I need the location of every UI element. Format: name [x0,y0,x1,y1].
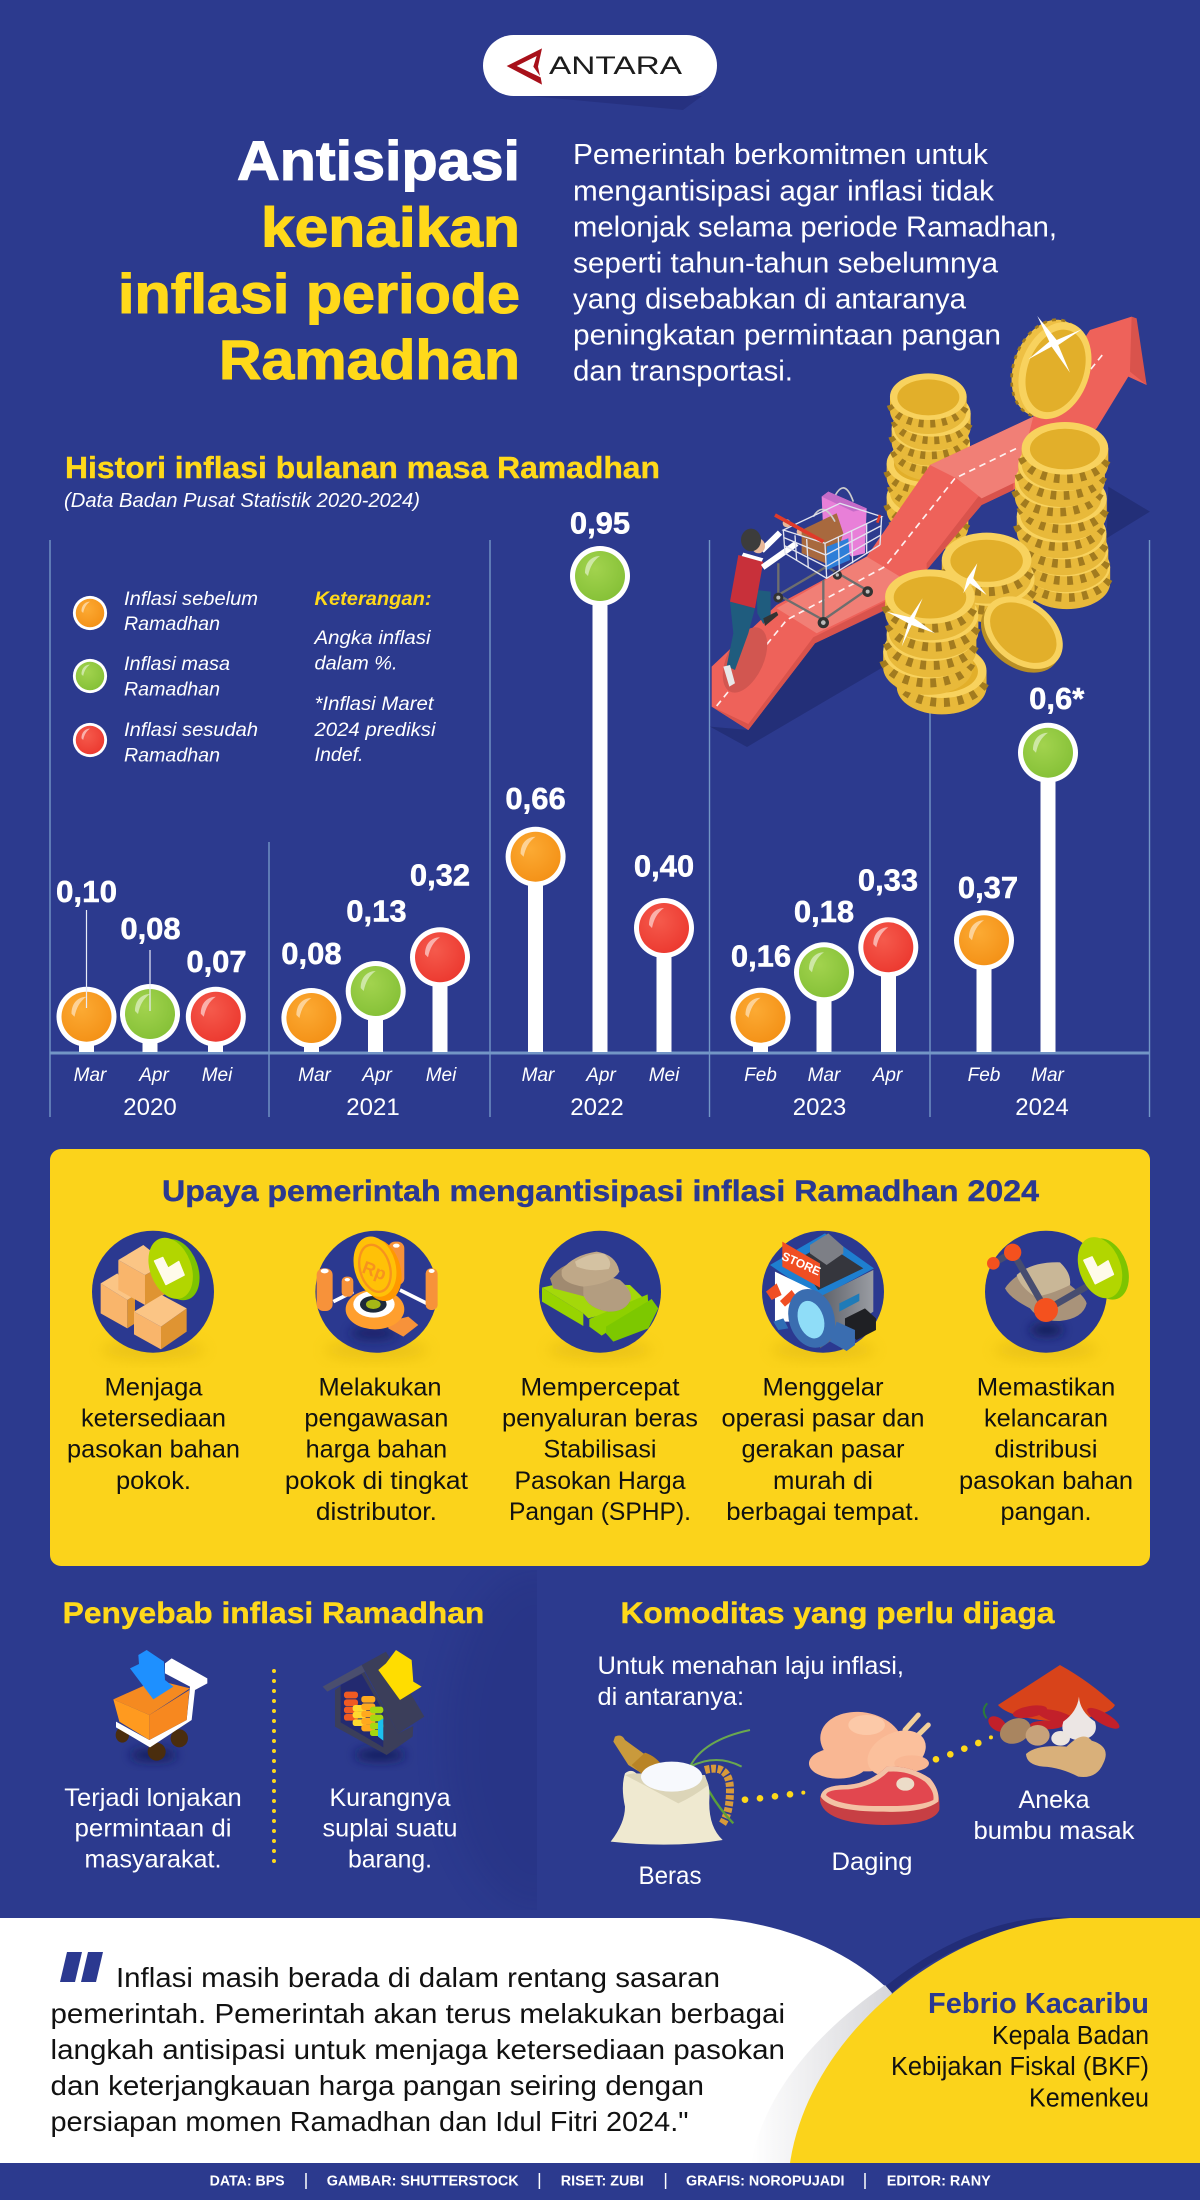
quote text: persiapan momen Ramadhan dan Idul Fitri 2024." [50,2106,688,2137]
notes: dalam %. [314,654,398,674]
intro paragraph: peningkatan permintaan pangan [573,320,1001,352]
chart axis labels: 2021 [346,1094,400,1121]
text: cause 2: barang. [348,1846,432,1874]
text: column 3: penyaluran beras [502,1405,698,1433]
chart axis labels: Mei [649,1065,680,1086]
labels: commodities: Aneka [1018,1786,1090,1814]
icon: distribution [985,1231,1137,1359]
logo: ANTARA [483,35,717,110]
text: cause 2: Kurangnya [330,1784,451,1812]
2020 group: 0,10 [56,874,117,909]
text: column 2: pokok di tingkat [285,1467,468,1495]
legend [73,589,258,766]
section shadow [447,1570,627,1910]
2023 group: 0,16 [731,939,791,974]
notes [313,589,436,766]
2024 group: 0,37 [958,870,1018,905]
2021 group: 0,32 [410,858,470,893]
rising arrow [712,317,1147,730]
title: Antisipasi [237,129,520,192]
text: column 4: murah di [773,1467,873,1495]
footer credits: RISET: ZUBI [561,2174,644,2190]
icon: shopping cart with arrow [113,1650,207,1761]
icon: price monitoring: Rp [360,1257,389,1284]
text: column 3: Pangan (SPHP). [509,1498,691,1526]
legend: after Ramadhan: Inflasi sesudah [124,720,258,741]
coin stacks front [883,309,1110,714]
intro paragraph: yang disebabkan di antaranya [573,284,967,316]
lollipop chart [56,506,1085,1052]
text: column 1: ketersediaan [81,1405,226,1433]
speaker [891,1988,1149,2112]
panel: causes of inflation [63,1597,484,1874]
intro paragraph: melonjak selama periode Ramadhan, [573,212,1057,244]
quote text: dan keterjangkauan harga pangan seiring dengan [50,2070,704,2101]
title: inflasi periode [118,262,520,325]
text: cause 2: suplai suatu [322,1815,458,1843]
causes heading: Penyebab inflasi Ramadhan [63,1597,484,1630]
2020 group [56,874,247,1047]
speaker: Kemenkeu [1029,2084,1149,2112]
divider dots [272,1671,276,1865]
text: column 2: harga bahan [306,1436,447,1464]
footer credits: GRAFIS: NOROPUJADI [686,2174,844,2190]
illustration: spices [984,1665,1122,1777]
chart axis labels: Mar [808,1065,841,1086]
commodities intro: Untuk menahan laju inflasi, [598,1652,904,1680]
footer credits: GAMBAR: SHUTTERSTOCK [327,2174,519,2190]
2022 group: 0,95 [570,506,630,540]
chart heading: Histori inflasi bulanan masa Ramadhan [65,450,660,485]
2023 group [730,863,918,1048]
quote panel [0,1917,1200,2163]
icon: house with supply bars [323,1650,424,1761]
text: column 3: Stabilisasi [544,1436,656,1464]
2021 group: 0,08 [281,936,342,971]
title [118,129,520,391]
sparkles [887,316,1082,647]
chart grid lines [50,540,1150,1117]
footer credits: EDITOR: RANY [887,2174,991,2190]
quote text: pemerintah. Pemerintah akan terus melakukan berbagai [50,1998,785,2029]
speaker: Kepala Badan [992,2022,1149,2050]
illustration: shopper, rising arrow and coins [710,309,1150,747]
panel: government efforts [50,1149,1150,1566]
illustration: rice sack [611,1730,750,1845]
intro paragraph: mengantisipasi agar inflasi tidak [573,176,995,208]
quote text [50,1962,785,2137]
2023 group: 0,33 [858,863,918,898]
text: column 1 [67,1374,240,1495]
2024 group: 0,6* [1029,681,1085,716]
quote text: langkah antisipasi untuk menjaga ketersediaan pasokan [50,2034,785,2065]
icon: store and magnifier [762,1231,884,1359]
text: column 3 [502,1374,698,1526]
dotted connectors [742,1735,993,1803]
text: column 1: pasokan bahan [67,1436,240,1464]
2022 group [505,506,694,958]
coin stack back [887,373,971,551]
text: column 4: gerakan pasar [742,1436,904,1464]
legend: during Ramadhan: Ramadhan [124,680,220,700]
chart axis labels: Mar [522,1065,555,1086]
text: column 5: pangan. [1000,1498,1092,1526]
text: column 1: Menjaga [104,1374,203,1402]
legend: after Ramadhan [73,720,258,766]
quote text: Inflasi masih berada di dalam rentang sasaran [116,1962,720,1993]
labels: commodities: Daging [832,1848,912,1876]
notes: Indef. [314,745,364,766]
speaker: Febrio Kacaribu [928,1988,1149,2020]
title: Ramadhan [219,328,520,391]
text: column 5 [959,1374,1133,1526]
2023 group: 0,18 [794,894,854,929]
text: column 1: pokok. [116,1467,191,1495]
legend: during Ramadhan [73,654,230,700]
2022 group: 0,40 [634,849,694,884]
text: cause 1: masyarakat. [84,1846,222,1874]
icon: store and magnifier: STORE [780,1249,823,1279]
text: column 2: distributor. [316,1498,437,1526]
text: column 3: Pasokan Harga [514,1467,686,1495]
text: column 5: pasokan bahan [959,1467,1133,1495]
2020 group: 0,08 [120,911,181,946]
text: column 5: kelancaran [984,1405,1108,1433]
text: cause 2 [322,1784,458,1874]
commodities intro: di antaranya: [598,1683,744,1711]
icon: boxes with check [92,1231,214,1359]
chart axis labels: Mar [1031,1065,1065,1086]
chart axis labels [74,1065,1069,1121]
legend: before Ramadhan: Inflasi sebelum [124,589,258,610]
chart axis labels: Mei [426,1065,457,1086]
chart axis labels: Mar [74,1065,107,1086]
icon: price monitoring [315,1231,438,1359]
footer credits [210,2173,991,2190]
icon: rice and money [539,1231,661,1359]
2020 group: 0,07 [186,944,247,979]
intro paragraph: seperti tahun-tahun sebelumnya [573,248,999,280]
chart axis labels: Apr [872,1065,903,1086]
chart axis labels: Apr [361,1065,392,1086]
text: column 2: Melakukan [318,1374,442,1402]
text: column 3: Mempercepat [520,1374,680,1402]
notes: 2024 prediksi [313,720,436,741]
labels: commodities: Beras [638,1862,702,1890]
legend: before Ramadhan [73,589,258,635]
title: kenaikan [261,196,520,258]
notes: Angka inflasi [313,628,431,649]
text: column 4 [722,1374,924,1526]
text: column 2 [285,1374,468,1526]
panel: commodities [598,1597,1135,1890]
2021 group [281,858,470,1048]
notes: Keterangan: [314,589,432,610]
chart axis labels: 2023 [793,1094,846,1121]
chart axis labels: Apr [138,1065,169,1086]
chart axis labels: 2020 [123,1094,177,1121]
text: column 2: pengawasan [304,1405,448,1433]
2021 group: 0,13 [346,894,407,929]
text: column 4: operasi pasar dan [722,1405,924,1433]
2022 group: 0,66 [505,781,566,816]
intro paragraph [573,139,1057,388]
commodities intro [598,1652,904,1711]
footer credits: DATA: BPS [210,2174,285,2190]
shopping cart with bags [773,488,882,628]
2024 group [954,681,1085,970]
text: column 5: distribusi [994,1436,1098,1464]
text: cause 1: Terjadi lonjakan [64,1784,242,1812]
shopper [723,519,805,687]
labels: commodities: bumbu masak [974,1817,1135,1845]
icon: quotation mark [60,1952,103,1982]
chart axis labels: 2024 [1015,1094,1069,1121]
text: column 4: Menggelar [762,1374,884,1402]
text: column 5: Memastikan [977,1374,1115,1402]
text: cause 1: permintaan di [74,1815,232,1843]
intro paragraph: Pemerintah berkomitmen untuk [573,139,988,171]
chart source note: (Data Badan Pusat Statistik 2020-2024) [64,490,420,512]
legend: after Ramadhan: Ramadhan [124,746,220,766]
labels: commodities [638,1786,1135,1890]
illustration: chicken and beef [809,1706,939,1825]
speaker: Kebijakan Fiskal (BKF) [891,2053,1149,2081]
logo: ANTARA: ANTARA [549,52,682,80]
chart axis labels: Apr [585,1065,616,1086]
commodities heading: Komoditas yang perlu dijaga [620,1597,1055,1630]
panel heading: Upaya pemerintah mengantisipasi inflasi Ramadhan 2024 [162,1175,1039,1208]
chart axis labels: Mei [202,1065,233,1086]
chart axis labels: Mar [298,1065,332,1086]
intro paragraph: dan transportasi. [573,356,793,388]
chart axis labels: 2022 [570,1094,624,1121]
legend: before Ramadhan: Ramadhan [124,614,220,635]
text: cause 1 [64,1784,242,1874]
text: column 4: berbagai tempat. [726,1498,920,1526]
legend: during Ramadhan: Inflasi masa [124,654,230,675]
notes: *Inflasi Maret [314,694,434,715]
chart axis labels: Feb [744,1065,777,1086]
chart axis labels: Feb [968,1065,1000,1086]
